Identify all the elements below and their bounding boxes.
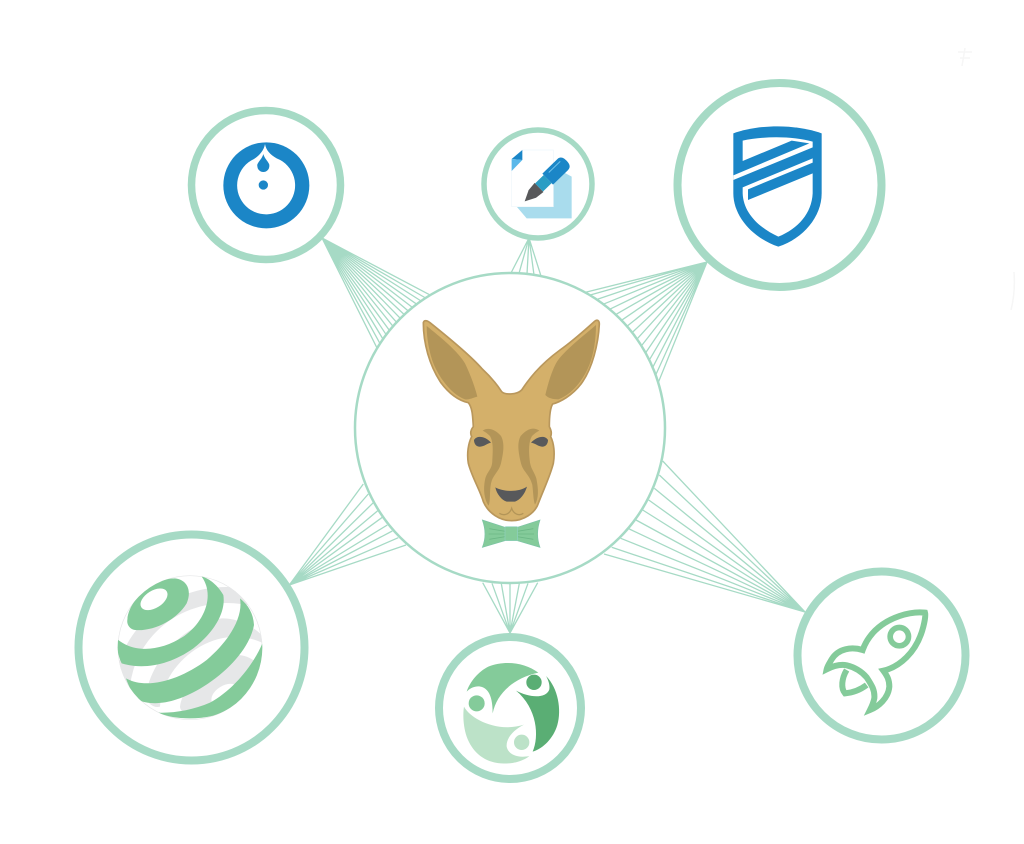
satellite circle: rocket [798,572,966,740]
connector fan: lower left [289,484,406,585]
left eye [474,437,491,447]
fountain pen [519,155,572,207]
satellite circle: droplet [192,110,340,260]
right eye [531,437,548,447]
mouth [499,508,523,515]
left face marking [483,429,503,506]
green stripes [127,578,189,630]
icon: droplet ring [223,142,309,228]
connector fan: top right [585,262,707,383]
connector fan: top centre [511,238,541,276]
nose [495,487,527,502]
right inner ear [545,325,596,399]
central hub circle [355,273,665,583]
icon: rocket [827,612,925,710]
left inner ear [427,326,477,399]
satellite circle: shield [678,83,882,287]
hub and spoke diagram [74,48,1015,783]
connector fan: lower right [604,461,805,612]
grey back stripes [120,587,248,682]
right face marking [518,429,539,505]
satellite circle: document [484,130,592,238]
icon: shield [733,126,822,247]
satellite circle: people [439,637,581,779]
icon: document and fountain pen [512,150,572,218]
connector fan: bottom [483,583,538,633]
satellite circle: globe [78,534,304,760]
kangaroo head outline [423,320,599,521]
icon: three people circle [463,663,559,764]
connector fan: top left [322,238,430,348]
icon: kangaroo head with bow tie [423,320,599,547]
icon: striped globe [118,576,262,720]
faint mark [958,48,1014,310]
bow tie [482,520,540,547]
